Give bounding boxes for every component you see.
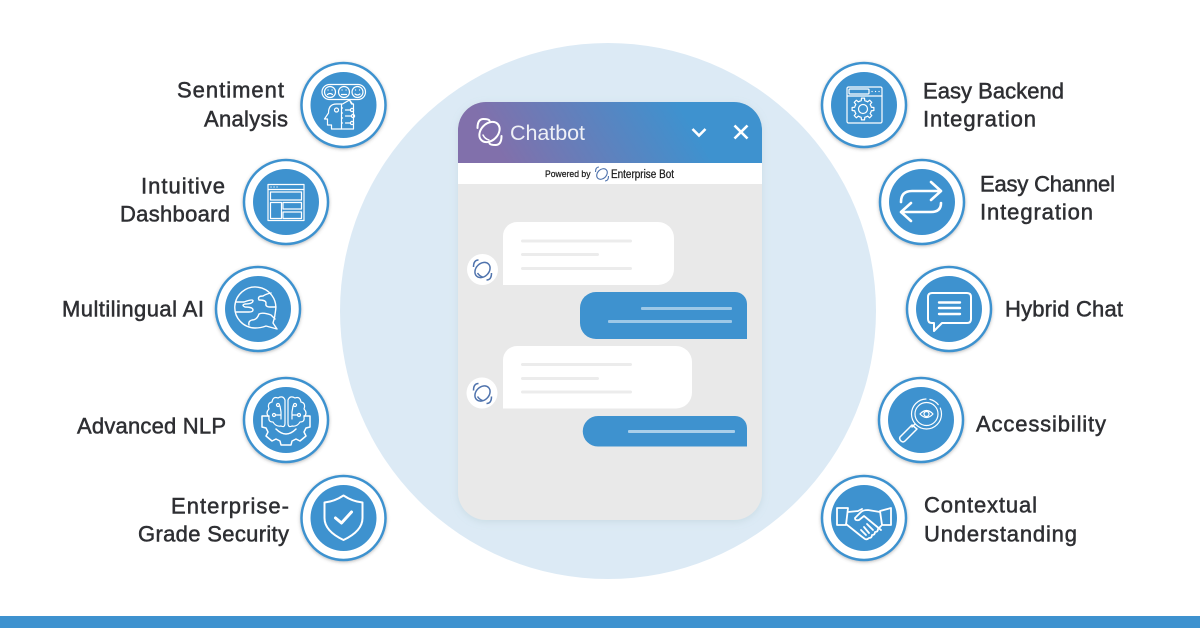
label: Multilingual AI bbox=[62, 296, 204, 322]
label bbox=[923, 78, 1064, 132]
label bbox=[120, 174, 230, 226]
label: Dashboard bbox=[120, 202, 230, 226]
user message 1 bbox=[580, 292, 747, 339]
label: Integration bbox=[923, 106, 1036, 132]
icon: window with gear bbox=[822, 63, 906, 147]
icon: chatbot logo bbox=[475, 118, 504, 146]
icon: brain and gear bbox=[244, 378, 328, 462]
label: Integration bbox=[980, 200, 1093, 224]
icon: dashboard window bbox=[244, 160, 328, 244]
feature: sentiment analysis bbox=[177, 63, 386, 147]
chatbot title: Chatbot bbox=[510, 121, 585, 145]
icon: magnifier with eye bbox=[879, 378, 963, 462]
bot message 2 bbox=[503, 346, 692, 408]
label: Enterprise- bbox=[171, 494, 289, 518]
icon: close bbox=[734, 126, 748, 138]
feature: advanced NLP bbox=[77, 378, 328, 462]
chat window body bbox=[458, 102, 762, 520]
background circle bbox=[340, 43, 876, 579]
feature: intuitive dashboard bbox=[120, 160, 328, 244]
bot avatar 2 bbox=[466, 378, 498, 408]
feature: easy channel integration bbox=[880, 160, 1115, 244]
feature: contextual understanding bbox=[822, 476, 1077, 560]
icon: small logo bbox=[595, 167, 609, 181]
icon: shield with check bbox=[302, 476, 386, 560]
feature: enterprise-grade security bbox=[138, 476, 386, 560]
feature: easy backend integration bbox=[822, 63, 1064, 147]
label: Advanced NLP bbox=[77, 414, 226, 438]
feature: hybrid chat bbox=[907, 267, 1123, 351]
feature: accessibility bbox=[879, 378, 1106, 462]
label: Easy Channel bbox=[980, 172, 1115, 196]
label bbox=[138, 494, 289, 546]
icon: speech bubble bbox=[907, 267, 991, 351]
powered by strip: Powered by bbox=[545, 169, 591, 180]
powered by strip bbox=[458, 163, 762, 184]
label bbox=[980, 172, 1115, 224]
bottom bar bbox=[0, 616, 1200, 628]
label: Grade Security bbox=[138, 522, 289, 546]
label: Analysis bbox=[204, 106, 288, 132]
icon: globe speech bubble bbox=[216, 267, 300, 351]
chat header bbox=[458, 102, 762, 163]
label: Accessibility bbox=[976, 412, 1106, 436]
feature: multilingual AI bbox=[62, 267, 300, 351]
label: Intuitive bbox=[141, 174, 225, 198]
powered by strip: Enterprise Bot bbox=[611, 169, 675, 181]
user message 2 bbox=[583, 416, 747, 446]
label: Understanding bbox=[924, 522, 1077, 546]
label bbox=[924, 492, 1077, 546]
icon: faces and head bbox=[302, 63, 386, 147]
bot message 1 bbox=[503, 222, 674, 285]
bot avatar 1 bbox=[467, 254, 498, 285]
label: Contextual bbox=[924, 492, 1037, 518]
panel: chatbot window bbox=[458, 102, 762, 520]
icon: swap arrows bbox=[880, 160, 964, 244]
icon: handshake bbox=[822, 476, 906, 560]
label bbox=[177, 78, 288, 132]
label: Sentiment bbox=[177, 78, 284, 102]
label: Hybrid Chat bbox=[1005, 296, 1123, 322]
icon: minimise chevron bbox=[692, 129, 706, 136]
label: Easy Backend bbox=[923, 78, 1064, 104]
